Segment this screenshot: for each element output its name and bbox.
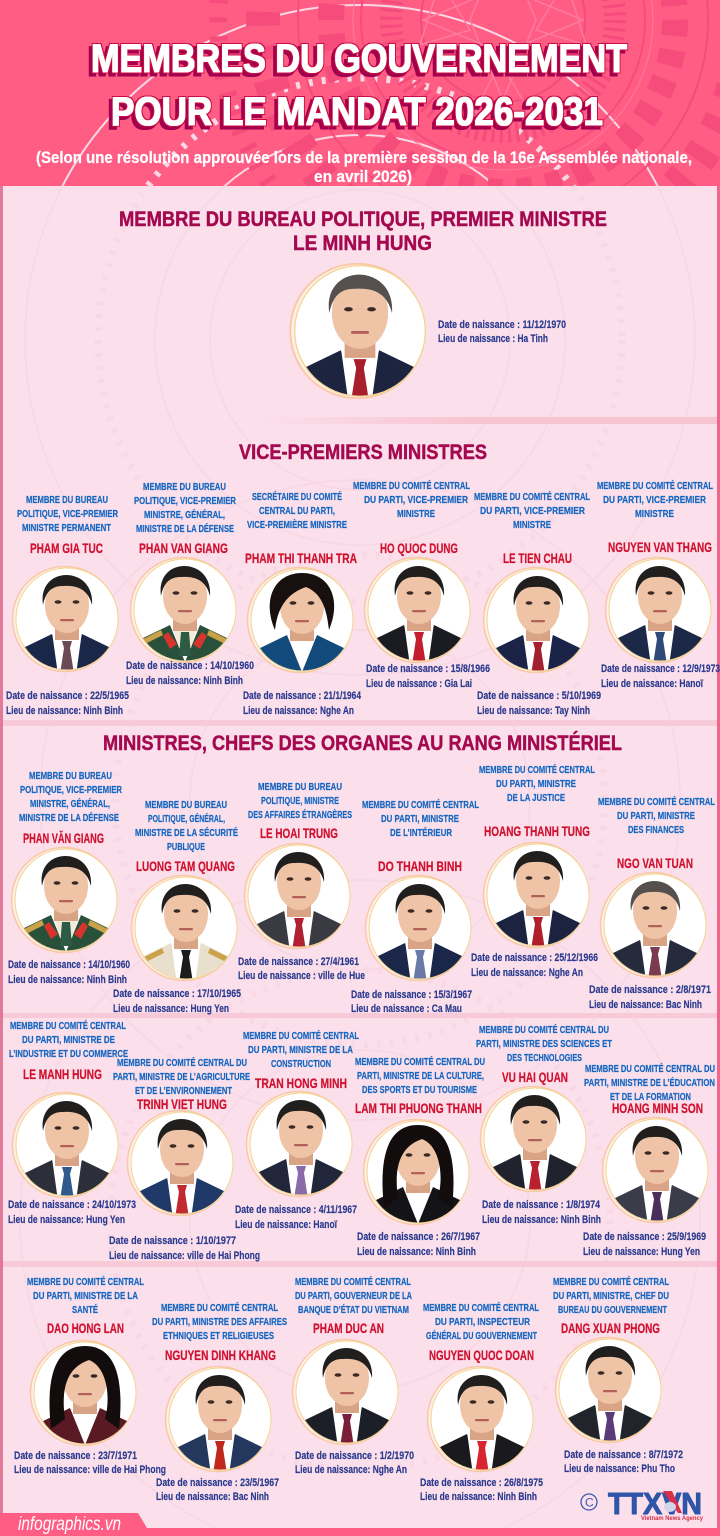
- logo: TTXVN: TTXVN: [608, 1486, 702, 1521]
- birth info: Lieu de naissance: Hanoï: [235, 1219, 338, 1231]
- role: MEMBRE DU BUREAU: [258, 781, 342, 793]
- role: POLITIQUE, MINISTRE: [261, 795, 339, 807]
- role: SANTÉ: [72, 1303, 98, 1316]
- heading: ministers: MINISTRES, CHEFS DES ORGANES AU RANG MINISTÉRIEL: [103, 732, 622, 755]
- card: Luong Tam Quang: [113, 799, 241, 1015]
- portrait: [166, 1366, 274, 1479]
- role: POLITIQUE, GÉNÉRAL,: [148, 812, 225, 825]
- role: [476, 1023, 612, 1064]
- role: MEMBRE DU COMITÉ CENTRAL: [243, 1029, 359, 1042]
- birth info: Lieu de naissance: Ninh Binh: [482, 1214, 601, 1226]
- role: DU PARTI, MINISTRE, CHEF DU: [553, 1290, 669, 1302]
- portrait: [12, 566, 121, 679]
- birth info: Le Minh Hung: Date de naissance : 11/12/1970: [438, 319, 566, 331]
- name: LAM THI PHUONG THANH: [355, 1100, 482, 1116]
- card: Le Hoai Trung: [238, 781, 365, 982]
- birth info: Date de naissance : 27/4/1961: [238, 956, 359, 968]
- birth info: Date de naissance : 1/8/1974: [482, 1199, 601, 1211]
- birth info: Date de naissance : 24/10/1973: [8, 1199, 136, 1211]
- birth info: Lieu de naissance: Ninh Binh: [6, 705, 123, 717]
- birth info: [109, 1235, 260, 1262]
- portrait: [600, 872, 709, 985]
- birth info: Lieu de naissance: Hung Yen: [113, 1003, 229, 1015]
- name: HO QUOC DUNG: [380, 540, 458, 556]
- role: MEMBRE DU COMITÉ CENTRAL: [295, 1275, 411, 1288]
- role: MINISTRE DE LA DÉFENSE: [19, 811, 119, 824]
- role: [362, 798, 479, 839]
- birth info: Date de naissance : 15/3/1967: [351, 989, 472, 1001]
- birth info: Date de naissance : 1/2/1970: [295, 1450, 414, 1462]
- portrait: [246, 1092, 355, 1204]
- birth info: [156, 1477, 279, 1503]
- birth info: [366, 663, 490, 690]
- birth info: Lieu de naissance: Nghe An: [243, 705, 354, 717]
- card: Tran Hong Minh: [235, 1029, 359, 1231]
- role: [27, 1275, 144, 1316]
- role: MEMBRE DU COMITÉ CENTRAL: [362, 798, 479, 811]
- birth info: Lieu de naissance: Nghe An: [295, 1464, 407, 1476]
- name: PHAM DUC AN: [313, 1320, 384, 1336]
- name: NGUYEN QUOC DOAN: [429, 1347, 534, 1363]
- footer text: infographics.vn: infographics.vn: [18, 1514, 121, 1535]
- birth info: Date de naissance : 21/1/1964: [243, 690, 362, 702]
- birth info: [351, 989, 472, 1015]
- portrait: [12, 848, 120, 960]
- portrait: [132, 876, 240, 988]
- role: PARTI, MINISTRE DES SCIENCES ET: [476, 1038, 612, 1050]
- card: Do Thanh Binh: [351, 798, 479, 1015]
- role: POLITIQUE, VICE-PREMIER: [20, 784, 122, 796]
- card: Le Manh Hung: [8, 1019, 136, 1226]
- portrait: [484, 568, 592, 680]
- birth info: [477, 690, 601, 717]
- birth info: [295, 1450, 414, 1476]
- role: SECRÉTAIRE DU COMITÉ: [252, 490, 342, 503]
- title: MEMBRES DU GOUVERNEMENT: [91, 37, 627, 81]
- role: POLITIQUE, VICE-PREMIER: [134, 495, 236, 507]
- birth info: [420, 1477, 543, 1503]
- role: [474, 490, 590, 531]
- portrait: [128, 1110, 236, 1223]
- role: DES TECHNOLOGIES: [507, 1052, 582, 1064]
- role: DU PARTI, MINISTRE: [381, 813, 459, 825]
- heading: vice prime ministers: VICE-PREMIERS MINISTRES: [239, 441, 487, 464]
- portrait: [364, 558, 473, 670]
- name: PHAN VAN GIANG: [139, 540, 228, 556]
- portrait: [602, 1118, 711, 1230]
- role: MINISTRE: [513, 519, 551, 531]
- card: Dang Xuan Phong: [553, 1275, 683, 1475]
- name: NGUYEN DINH KHANG: [165, 1347, 276, 1363]
- subtitle: [36, 148, 692, 186]
- role: [248, 781, 352, 821]
- birth info: [6, 690, 129, 717]
- portrait: [484, 842, 592, 955]
- birth info: [8, 1199, 136, 1226]
- card: Pham Duc An: [292, 1275, 414, 1476]
- card: Phan Van Giang (ministre): [8, 770, 130, 986]
- role: BUREAU DU GOUVERNEMENT: [558, 1304, 667, 1316]
- role: MEMBRE DU BUREAU: [29, 770, 112, 782]
- header drum pattern: [209, 0, 720, 186]
- role: PUBLIQUE: [167, 841, 205, 853]
- name: PHAN VĂN GIANG: [23, 830, 104, 846]
- role: DU PARTI, MINISTRE: [617, 810, 695, 822]
- role: [135, 799, 238, 853]
- logo: TTXVN: Vietnam News Agency: [641, 1516, 704, 1522]
- role: MEMBRE DU COMITÉ CENTRAL DU: [479, 1023, 609, 1036]
- title: [91, 37, 627, 134]
- role: [479, 763, 595, 804]
- role: MEMBRE DU COMITÉ CENTRAL: [479, 763, 595, 776]
- portrait: [428, 1366, 536, 1479]
- portrait: [292, 1340, 401, 1452]
- role: PARTI, MINISTRE DE L’AGRICULTURE: [113, 1071, 250, 1083]
- birth info: Lieu de naissance: Nghe An: [471, 967, 583, 979]
- name: HOANG THANH TUNG: [484, 823, 590, 839]
- birth info: [482, 1199, 601, 1226]
- birth info: Date de naissance : 23/7/1971: [14, 1450, 137, 1462]
- birth info: Date de naissance : 15/8/1966: [366, 663, 490, 675]
- birth info: [126, 660, 254, 687]
- panel: prime minister: [119, 208, 607, 408]
- portrait: [130, 558, 239, 670]
- role: DU PARTI, MINISTRE: [496, 778, 576, 790]
- role: MINISTRE: [635, 508, 674, 520]
- role: [17, 494, 118, 534]
- role: [247, 490, 347, 531]
- card: Dao Hong Lan: [14, 1275, 166, 1476]
- card: Pham Gia Tuc: [6, 494, 129, 717]
- role: MEMBRE DU COMITÉ CENTRAL: [423, 1301, 539, 1314]
- name: TRAN HONG MINH: [255, 1075, 347, 1091]
- card: Vu Hai Quan: [476, 1023, 612, 1226]
- card: Nguyen Dinh Khang: [152, 1301, 287, 1503]
- birth info: Lieu de naissance: Ninh Binh: [357, 1246, 476, 1258]
- name: LUONG TAM QUANG: [136, 858, 235, 874]
- role: [355, 1055, 485, 1096]
- birth info: Date de naissance : 22/5/1965: [6, 690, 129, 702]
- birth info: [589, 984, 711, 1011]
- role: MEMBRE DU COMITÉ CENTRAL: [353, 479, 470, 492]
- role: [152, 1301, 287, 1342]
- birth info: [8, 959, 130, 986]
- role: DU PARTI, INSPECTEUR: [435, 1316, 530, 1328]
- birth info: [113, 988, 241, 1015]
- role: ET DE L’ENVIRONNEMENT: [135, 1085, 232, 1097]
- role: DES FINANCES: [628, 824, 684, 836]
- role: DU PARTI, MINISTRE DE LA: [33, 1290, 138, 1302]
- birth info: Lieu de naissance: Ninh Binh: [126, 675, 243, 687]
- role: DES SPORTS ET DU TOURISME: [362, 1084, 477, 1096]
- role: DU PARTI, GOUVERNEUR DE LA: [295, 1290, 412, 1302]
- role: MINISTRE DE LA DÉFENSE: [136, 522, 234, 535]
- birth info: Date de naissance : 26/7/1967: [357, 1231, 480, 1243]
- decorative section bands: [3, 417, 717, 1267]
- birth info: Date de naissance : 14/10/1960: [8, 959, 130, 971]
- birth info: [243, 690, 362, 717]
- card: Le Tien Chau: [474, 490, 601, 717]
- card: Nguyen Van Thang: [597, 479, 720, 690]
- role: DES AFFAIRES ÉTRANGÈRES: [248, 808, 352, 821]
- role: MEMBRE DU COMITÉ CENTRAL: [474, 490, 590, 503]
- portrait: Le Minh Hung: [290, 264, 429, 408]
- birth info: Date de naissance : 8/7/1972: [564, 1449, 683, 1461]
- role: [243, 1029, 359, 1070]
- birth info: Lieu de naissance: ville de Hai Phong: [14, 1464, 166, 1476]
- birth info: Lieu de naissance : Gia Lai: [366, 678, 472, 690]
- birth info: Date de naissance : 17/10/1965: [113, 988, 241, 1000]
- role: [553, 1275, 669, 1316]
- heading: prime minister: MEMBRE DU BUREAU POLITIQUE, PREMIER MINISTRE: [119, 208, 607, 231]
- portrait: [364, 1120, 472, 1232]
- role: MINISTRE: [397, 508, 435, 520]
- role: MEMBRE DU BUREAU: [26, 494, 108, 506]
- card: Ngo Van Tuan: [589, 795, 715, 1011]
- birth info: [601, 663, 720, 690]
- name: PHAM THI THANH TRA: [245, 550, 357, 566]
- portrait: [30, 1340, 139, 1453]
- role: [134, 481, 236, 535]
- role: MEMBRE DU COMITÉ CENTRAL: [10, 1019, 126, 1032]
- role: [9, 1019, 128, 1060]
- card: Trinh Viet Hung: [109, 1056, 260, 1262]
- role: [423, 1301, 539, 1342]
- role: [353, 479, 470, 520]
- birth info: [583, 1231, 706, 1258]
- birth info: Date de naissance : 5/10/1969: [477, 690, 601, 702]
- birth info: [235, 1204, 357, 1231]
- portrait: [248, 568, 356, 680]
- role: MEMBRE DU BUREAU: [143, 481, 226, 493]
- birth info: Date de naissance : 26/8/1975: [420, 1477, 543, 1489]
- card: Pham Thi Thanh Tra: [243, 490, 362, 717]
- birth info: Le Minh Hung: Lieu de naissance : Ha Tinh: [438, 333, 548, 345]
- footer band: [0, 1513, 720, 1536]
- heading: prime minister: [119, 208, 607, 255]
- birth info: Lieu de naissance : Ca Mau: [351, 1003, 462, 1015]
- birth info: Date de naissance : 14/10/1960: [126, 660, 254, 672]
- role: DU PARTI, VICE-PREMIER: [480, 505, 585, 517]
- birth info: Le Minh Hung: [438, 319, 566, 345]
- name: DAO HONG LAN: [47, 1320, 124, 1336]
- birth info: Lieu de naissance: Ninh Binh: [420, 1491, 537, 1503]
- card: Lam Thi Phuong Thanh: [355, 1055, 485, 1258]
- portrait: [12, 1092, 121, 1205]
- birth info: Lieu de naissance: ville de Hai Phong: [109, 1250, 260, 1262]
- birth info: Lieu de naissance : ville de Hue: [238, 970, 365, 982]
- role: MEMBRE DU COMITÉ CENTRAL: [161, 1301, 278, 1314]
- role: MEMBRE DU COMITÉ CENTRAL DU: [117, 1056, 247, 1069]
- birth info: Lieu de naissance: Phu Tho: [564, 1463, 675, 1475]
- role: [598, 795, 715, 836]
- birth info: Lieu de naissance: Hung Yen: [8, 1214, 125, 1226]
- role: MINISTRE DE LA SÉCURITÉ: [135, 826, 238, 839]
- role: ETHNIQUES ET RELIGIEUSES: [163, 1330, 274, 1342]
- card: Hoang Thanh Tung: [471, 763, 598, 979]
- portrait: [244, 844, 353, 956]
- name: PHAM GIA TUC: [30, 540, 103, 556]
- card: Phan Van Giang: [126, 481, 254, 687]
- portrait: [480, 1086, 589, 1199]
- birth info: [564, 1449, 683, 1475]
- role: DU PARTI, MINISTRE DES AFFAIRES: [152, 1316, 287, 1328]
- heading: prime minister: LE MINH HUNG: [293, 232, 432, 255]
- role: BANQUE D’ÉTAT DU VIETNAM: [298, 1303, 409, 1316]
- birth info: Date de naissance : 23/5/1967: [156, 1477, 279, 1489]
- role: DU PARTI, MINISTRE DE: [22, 1034, 115, 1046]
- birth info: Lieu de naissance: Bac Ninh: [156, 1491, 269, 1503]
- role: DU PARTI, VICE-PREMIER: [364, 494, 468, 506]
- role: VICE-PREMIÈRE MINISTRE: [247, 518, 347, 531]
- name: LE HOAI TRUNG: [260, 825, 338, 841]
- name: VU HAI QUAN: [502, 1069, 568, 1085]
- birth info: [14, 1450, 166, 1476]
- role: CENTRAL DU PARTI,: [259, 505, 335, 517]
- portrait: [366, 876, 474, 988]
- name: LE TIEN CHAU: [503, 550, 572, 566]
- role: MINISTRE PERMANENT: [22, 522, 111, 534]
- title: POUR LE MANDAT 2026-2031: [111, 90, 603, 134]
- role: MEMBRE DU COMITÉ CENTRAL: [553, 1275, 669, 1288]
- role: [19, 770, 122, 824]
- role: DU PARTI, MINISTRE DE LA: [248, 1044, 353, 1056]
- birth info: Date de naissance : 25/12/1966: [471, 952, 598, 964]
- name: DANG XUAN PHONG: [561, 1320, 660, 1336]
- logo: TTXVN: C: [585, 1496, 594, 1510]
- role: [113, 1056, 250, 1097]
- role: MINISTRE, GÉNÉRAL,: [30, 797, 110, 810]
- role: MEMBRE DU COMITÉ CENTRAL DU: [355, 1055, 485, 1068]
- birth info: Lieu de naissance: Ninh Binh: [8, 974, 127, 986]
- role: PARTI, MINISTRE DE LA CULTURE,: [357, 1070, 484, 1082]
- role: [584, 1062, 715, 1103]
- role: MINISTRE, GÉNÉRAL,: [144, 508, 225, 521]
- role: CONSTRUCTION: [271, 1058, 331, 1070]
- role: DE LA JUSTICE: [507, 792, 565, 804]
- role: DE L’INTÉRIEUR: [390, 826, 452, 839]
- role: POLITIQUE, VICE-PREMIER: [17, 508, 118, 520]
- role: [295, 1275, 412, 1316]
- card: Hoang Minh Son: [583, 1062, 715, 1258]
- role: ET DE LA FORMATION: [610, 1091, 691, 1103]
- name: TRINH VIET HUNG: [137, 1096, 227, 1112]
- name: DO THANH BINH: [378, 858, 462, 874]
- birth info: [357, 1231, 480, 1258]
- birth info: [238, 956, 365, 982]
- subtitle: en avril 2026): [314, 167, 412, 186]
- birth info: Lieu de naissance: Tay Ninh: [477, 705, 590, 717]
- role: GÉNÉRAL DU GOUVERNEMENT: [426, 1329, 537, 1342]
- portrait: [556, 1338, 664, 1450]
- birth info: Date de naissance : 1/10/1977: [109, 1235, 236, 1247]
- portrait: [606, 558, 714, 670]
- role: MEMBRE DU COMITÉ CENTRAL: [27, 1275, 144, 1288]
- role: [597, 479, 713, 520]
- role: MEMBRE DU BUREAU: [145, 799, 227, 811]
- name: LE MANH HUNG: [23, 1066, 102, 1082]
- birth info: [471, 952, 598, 979]
- role: L’INDUSTRIE ET DU COMMERCE: [9, 1048, 128, 1060]
- card: Nguyen Quoc Doan: [420, 1301, 543, 1503]
- birth info: Date de naissance : 4/11/1967: [235, 1204, 357, 1216]
- card: Ho Quoc Dung: [353, 479, 490, 690]
